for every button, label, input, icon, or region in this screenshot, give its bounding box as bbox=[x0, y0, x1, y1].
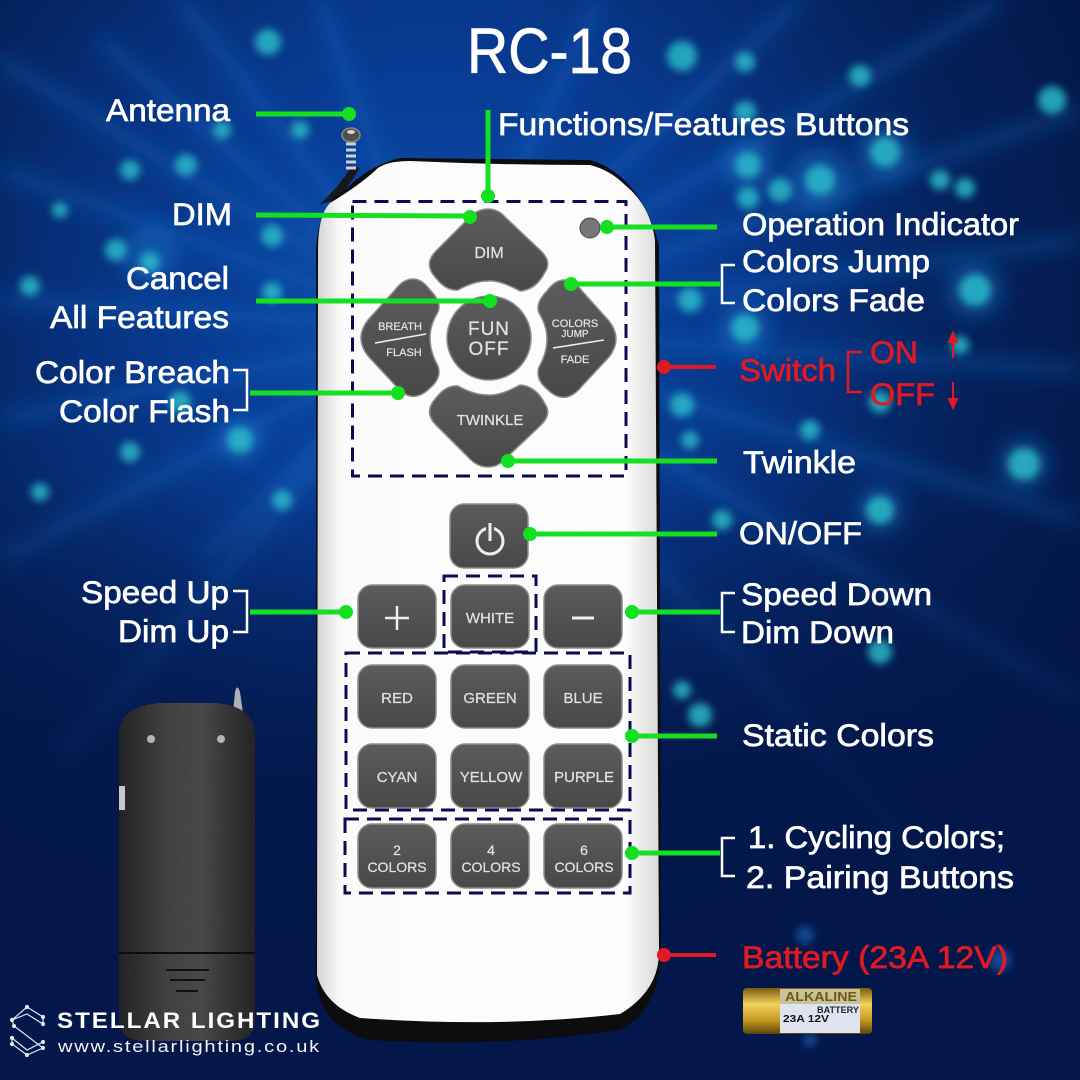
button: YELLOW: YELLOW bbox=[460, 769, 523, 786]
callout: cycling colors / pairing buttons: 2. Pairing Buttons bbox=[746, 859, 1014, 895]
button: RED bbox=[358, 665, 436, 728]
callout: color breach / color flash bbox=[35, 354, 405, 429]
callout: battery: Battery (23A 12V) bbox=[742, 939, 1008, 975]
icon: 23A battery: 23A 12V bbox=[783, 1013, 829, 1025]
logo: Stellar Lighting bbox=[10, 1006, 322, 1056]
icon: operation indicator LED bbox=[580, 218, 600, 238]
callout: switch on/off: OFF bbox=[870, 376, 935, 412]
icon: 23A battery: ALKALINE bbox=[785, 990, 857, 1004]
callout: functions/features buttons: Functions/Features Buttons bbox=[498, 106, 909, 142]
callout: speed down / dim down: Dim Down bbox=[741, 614, 894, 650]
button: BREATH / FLASH bbox=[361, 279, 439, 396]
callout: static colors bbox=[625, 717, 934, 753]
button: BREATH / FLASH: FLASH bbox=[386, 347, 422, 359]
button: GREEN: GREEN bbox=[463, 690, 517, 707]
rear view of remote bbox=[119, 688, 255, 1041]
button: BREATH / FLASH: BREATH bbox=[378, 321, 422, 333]
title: RC-18 bbox=[467, 15, 632, 87]
button: COLORS JUMP / FADE bbox=[538, 280, 616, 397]
button: DIM: DIM bbox=[474, 245, 504, 262]
callout: switch on/off: ON bbox=[870, 334, 918, 370]
remote control body bbox=[316, 158, 661, 1042]
button: 2 colours: COLORS bbox=[367, 859, 427, 875]
button: 2 colours: 2 bbox=[393, 842, 401, 858]
logo: Stellar Lighting: www.stellarlighting.co.uk bbox=[57, 1037, 321, 1056]
button: power bbox=[450, 504, 528, 568]
callout: cycling colors / pairing buttons: 1. Cycling Colors; bbox=[748, 819, 1005, 855]
button: TWINKLE bbox=[430, 385, 548, 467]
callout: operation indicator bbox=[600, 206, 1019, 242]
arrow: on up bbox=[949, 333, 957, 358]
callout: cancel all features bbox=[50, 260, 497, 335]
button: FUN OFF: OFF bbox=[468, 339, 510, 360]
button: RED: RED bbox=[381, 690, 413, 707]
callout: speed down / dim down bbox=[625, 576, 932, 650]
button: 2 colours bbox=[358, 824, 436, 888]
callout: DIM: DIM bbox=[172, 196, 232, 232]
button: PURPLE bbox=[544, 744, 622, 808]
button: WHITE bbox=[451, 585, 529, 648]
arrow: off down bbox=[949, 382, 957, 408]
callout: switch on/off bbox=[657, 333, 957, 412]
icon: 23A battery bbox=[743, 988, 872, 1034]
panel: speed and white buttons bbox=[358, 576, 622, 652]
callout: colors jump / colors fade: Colors Jump bbox=[742, 243, 930, 279]
button: 6 colours: 6 bbox=[580, 842, 588, 858]
logo: Stellar Lighting: STELLAR LIGHTING bbox=[57, 1008, 322, 1033]
button: DIM bbox=[430, 209, 548, 291]
button: CYAN bbox=[358, 744, 436, 808]
button: FUN OFF: FUN bbox=[468, 319, 510, 340]
panel: function buttons group bbox=[352, 202, 626, 476]
callout: speed up / dim up: Dim Up bbox=[118, 613, 229, 649]
callout: colors jump / colors fade bbox=[564, 243, 930, 318]
button: FUN OFF bbox=[447, 296, 531, 380]
button: 6 colours: COLORS bbox=[554, 859, 614, 875]
icon: constellation S bbox=[10, 1006, 44, 1056]
callout: speed down / dim down: Speed Down bbox=[741, 576, 932, 612]
button: COLORS JUMP / FADE: JUMP bbox=[561, 329, 589, 340]
button: BLUE bbox=[544, 665, 622, 728]
callout: cancel all features: Cancel bbox=[126, 260, 229, 296]
button: GREEN bbox=[451, 665, 529, 728]
panel: cycling colour buttons bbox=[345, 819, 630, 893]
button: 4 colours: COLORS bbox=[461, 859, 521, 875]
callout: speed up / dim up bbox=[81, 574, 353, 649]
callout: colors jump / colors fade: Colors Fade bbox=[742, 282, 925, 318]
callout: speed up / dim up: Speed Up bbox=[81, 574, 229, 610]
button: COLORS JUMP / FADE: FADE bbox=[561, 354, 589, 366]
button: 4 colours bbox=[451, 824, 529, 888]
button: COLORS JUMP / FADE: COLORS bbox=[552, 318, 598, 330]
button: PURPLE: PURPLE bbox=[554, 769, 614, 786]
button: TWINKLE: TWINKLE bbox=[457, 412, 523, 429]
callout: antenna bbox=[106, 92, 356, 128]
icon: 23A battery: BATTERY bbox=[817, 1005, 859, 1015]
icon: antenna tip bbox=[319, 128, 360, 205]
callout: antenna: Antenna bbox=[106, 92, 231, 128]
callout: DIM bbox=[172, 196, 477, 232]
callout: cycling colors / pairing buttons bbox=[625, 819, 1014, 895]
panel: static colour buttons bbox=[346, 653, 630, 810]
button: minus bbox=[544, 585, 622, 648]
callout: cancel all features: All Features bbox=[50, 299, 229, 335]
callout: functions/features buttons bbox=[481, 106, 909, 203]
callout: static colors: Static Colors bbox=[742, 717, 934, 753]
callout: color breach / color flash: Color Flash bbox=[59, 393, 230, 429]
callout: switch on/off: Switch bbox=[739, 352, 836, 388]
button: WHITE: WHITE bbox=[466, 610, 514, 627]
button: 4 colours: 4 bbox=[487, 842, 495, 858]
button: plus bbox=[358, 585, 436, 648]
button: YELLOW bbox=[451, 744, 529, 808]
button: 6 colours bbox=[544, 824, 622, 888]
callout: twinkle: Twinkle bbox=[743, 444, 856, 480]
callout: color breach / color flash: Color Breach bbox=[35, 354, 230, 390]
callout: twinkle bbox=[501, 444, 856, 480]
callout: on/off: ON/OFF bbox=[739, 515, 862, 551]
callout: operation indicator: Operation Indicator bbox=[742, 206, 1019, 242]
button: BLUE: BLUE bbox=[563, 690, 603, 707]
callout: on/off bbox=[523, 515, 862, 551]
button: CYAN: CYAN bbox=[377, 769, 417, 786]
